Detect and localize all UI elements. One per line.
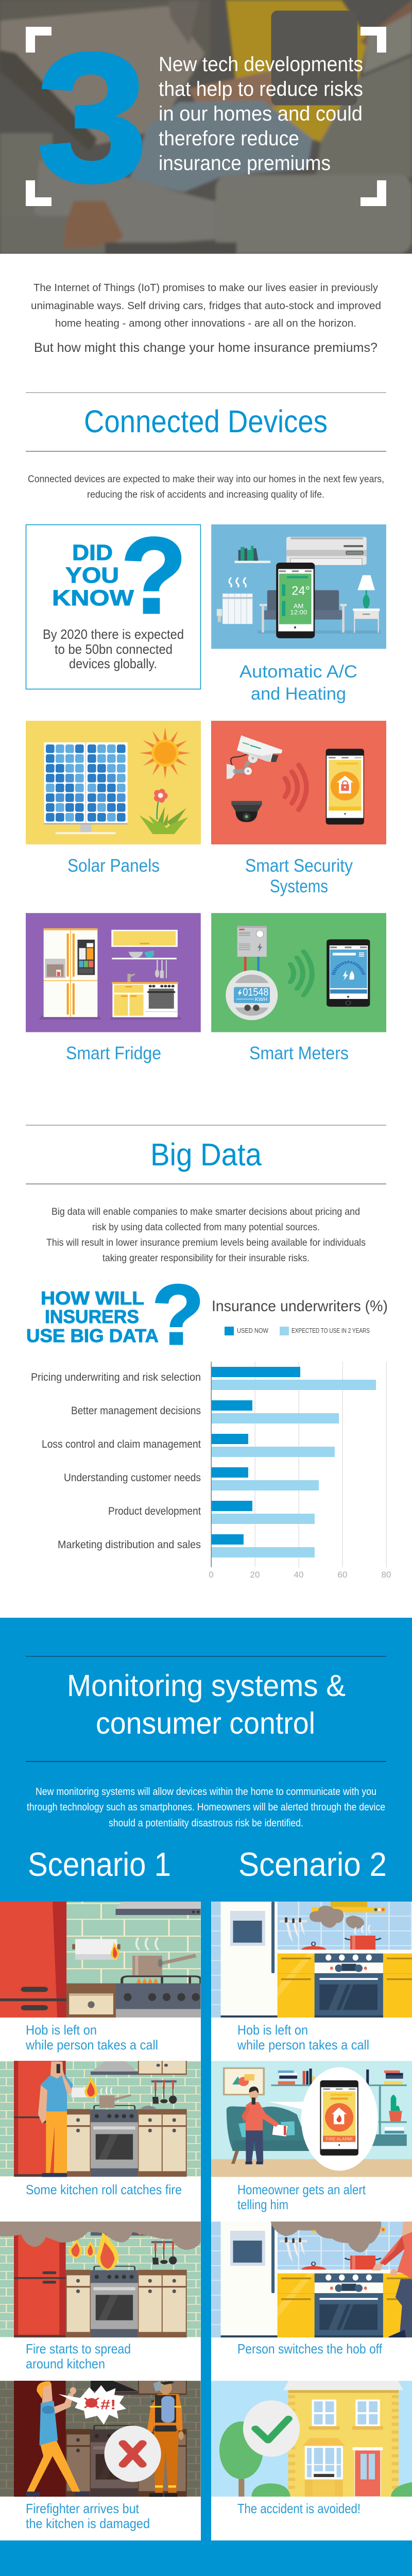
phone with thermostat: [276, 563, 315, 638]
hero title: that help to reduce risks: [159, 78, 363, 100]
icon: question mark: ?: [152, 1267, 204, 1363]
chart category labels: Loss control and claim management: [42, 1438, 201, 1450]
icon: flower and grass: [140, 789, 188, 834]
chart category labels: Pricing underwriting and risk selection: [31, 1371, 201, 1383]
chart category labels: Understanding customer needs: [64, 1472, 201, 1484]
did you know fact: [43, 626, 184, 671]
heading: how will insurers use big data: HOW WILL: [41, 1287, 144, 1309]
solar cells: [46, 744, 126, 822]
phone with thermostat: 12:00: [290, 608, 307, 616]
panel: smart meters illustration: KWH: [255, 996, 267, 1002]
scenario 2 step 2 caption: Homeowner gets an alert: [237, 2182, 366, 2197]
scenario 2 step 2 caption: telling him: [237, 2197, 288, 2212]
did you know fact: By 2020 there is expected: [43, 626, 184, 642]
heading: scenario 1: Scenario 1: [28, 1845, 171, 1883]
heading: scenario 2: Scenario 2: [238, 1845, 387, 1883]
corner bracket: bottom left: [26, 180, 52, 206]
scenario 1 step 3 illustration: [0, 2222, 201, 2337]
monitoring text block: [27, 1786, 385, 1829]
scenario 2 step 3 caption: Person switches the hob off: [237, 2341, 383, 2357]
icon: smoke clouds: [310, 1906, 344, 1928]
scenario 2 step 4 illustration: [211, 2381, 412, 2497]
panel: smart fridge illustration: [26, 913, 201, 1032]
panel: scenario 1 column background: [0, 1902, 201, 2540]
chart legend: EXPECTED TO USE IN 2 YEARS: [291, 1327, 370, 1334]
heading: how will insurers use big data: USE BIG DATA: [26, 1325, 159, 1346]
panel: did you know: [26, 515, 201, 689]
icon: smoke cloud: [0, 2222, 201, 2250]
icon: smoke cloud: [271, 2222, 381, 2252]
chart axis labels: 60: [338, 1570, 347, 1580]
hero panel: [0, 0, 412, 254]
monitoring text block: New monitoring systems will allow devices within the home to communicate with you: [36, 1786, 376, 1798]
angry homeowner: [26, 2381, 89, 2496]
hero title: [159, 53, 363, 175]
connected devices intro text: Connected devices are expected to make their way into our homes in the next few years,: [28, 473, 384, 485]
panel: smart security systems illustration: [211, 721, 386, 844]
caption: smart fridge: Smart Fridge: [66, 1043, 161, 1063]
intro text block: The Internet of Things (IoT) promises to make our lives easier in previously: [33, 282, 378, 294]
scenario 1 step 3 caption: around kitchen: [26, 2356, 105, 2371]
house: [283, 2381, 403, 2497]
firefighter: [147, 2380, 184, 2497]
caption: automatic AC and heating: [239, 662, 357, 704]
hero photo: woman with tablet on sofa: [0, 0, 412, 254]
scenario 2 step 3 illustration: [211, 2222, 412, 2337]
hero title: insurance premiums: [159, 152, 331, 175]
speech bubble with phone alert: [301, 2067, 378, 2171]
big data text block: Big data will enable companies to make smarter decisions about pricing and: [52, 1207, 360, 1217]
person switching off the hob: [372, 2222, 412, 2337]
icon: tick: [243, 2400, 300, 2457]
scenario 1 step 4 caption: Firefighter arrives but: [26, 2501, 140, 2516]
scenario 1 step 4 caption: [26, 2501, 150, 2531]
caption: solar panels: Solar Panels: [67, 856, 160, 876]
speech burst with swearing: [58, 2385, 126, 2425]
chart category labels: Product development: [108, 1505, 201, 1517]
scenario 2 step 2 illustration: [211, 2061, 412, 2177]
icon: sun: [140, 727, 191, 779]
corner bracket: top right: [360, 27, 386, 53]
person on the phone: [38, 2061, 73, 2177]
speech bubble with phone alert: FIRE ALARM!: [326, 2137, 353, 2141]
scenario 1 step 1 illustration: [0, 1902, 201, 2018]
scenario 1 step 2 caption: Some kitchen roll catches fire: [26, 2182, 182, 2197]
heading: monitoring systems and consumer control: consumer control: [96, 1706, 315, 1740]
icon: flames: [96, 2232, 119, 2270]
chart axis labels: 0: [209, 1570, 214, 1580]
speech burst with swearing: #!: [100, 2397, 116, 2412]
phone with thermostat: AM: [294, 602, 303, 609]
caption: smart security systems: Smart Security: [245, 856, 353, 876]
heading: Big Data: Big Data: [150, 1137, 262, 1172]
intro text block: But how might this change your home insurance premiums?: [34, 341, 377, 355]
chart legend: USED NOW: [237, 1327, 269, 1334]
scenario 1 step 1 caption: while person takes a call: [25, 2037, 158, 2053]
did you know heading: [52, 540, 134, 611]
big data text block: This will result in lower insurance premium levels being available for individuals: [46, 1238, 366, 1248]
panel: monitoring systems section background: [0, 1618, 412, 2576]
scenario 2 step 1 caption: [237, 2022, 369, 2053]
caption: smart security systems: Systems: [270, 876, 328, 896]
chart axis labels: 80: [382, 1570, 391, 1580]
scenario 1 step 4 caption: the kitchen is damaged: [26, 2516, 150, 2531]
scenario 2 step 1 caption: while person takes a call: [237, 2037, 369, 2053]
scenario 1 step 3 caption: Fire starts to spread: [26, 2341, 131, 2357]
icon: cross: [105, 2426, 161, 2482]
did you know fact: to be 50bn connected: [55, 641, 173, 657]
big data text block: risk by using data collected from many potential sources.: [92, 1222, 320, 1233]
chart axis labels: 40: [294, 1570, 303, 1580]
connected devices intro text: [28, 473, 384, 500]
panel: scenario 2 column background: [211, 1902, 412, 2540]
intro text block: home heating - among other innovations - are all on the horizon.: [55, 318, 356, 329]
caption: smart security systems: [245, 856, 353, 896]
panel: smart meters illustration: 01548: [243, 986, 268, 998]
phone with thermostat: 24°: [291, 584, 310, 598]
scenario 1 step 4 illustration: [0, 2380, 201, 2497]
icon: question mark: ?: [121, 515, 187, 636]
heading: monitoring systems and consumer control: [26, 1656, 386, 1762]
icon: wireless signal: [285, 765, 306, 810]
panel: smart meters illustration: [211, 913, 386, 1032]
did you know heading: KNOW: [52, 586, 134, 611]
scenario 2 step 1 caption: Hob is left on: [237, 2022, 308, 2038]
heading: how will insurers use big data: INSURERS: [45, 1306, 139, 1327]
panel: automatic AC and heating illustration: [211, 524, 386, 649]
bar chart: [31, 1362, 391, 1580]
monitoring text block: should a potentiality disastrous risk be identified.: [109, 1818, 303, 1829]
chart category labels: [31, 1371, 201, 1551]
corner bracket: bottom right: [360, 180, 386, 206]
intro text block: [31, 282, 381, 355]
scenario 1 step 3 caption: [26, 2341, 131, 2371]
icon: security camera: [227, 735, 282, 779]
chart axis labels: 20: [250, 1570, 260, 1580]
chart category labels: Better management decisions: [71, 1405, 201, 1417]
did you know heading: DID: [72, 540, 113, 565]
corner bracket: top left: [26, 27, 52, 53]
panel: solar panels illustration: [26, 721, 201, 844]
big data text block: taking greater responsibility for their insurable risks.: [102, 1253, 310, 1264]
chart legend: [225, 1327, 370, 1335]
icon: dome camera: [231, 801, 262, 822]
chart category labels: Marketing distribution and sales: [58, 1539, 201, 1551]
scenario 1 step 2 illustration: [0, 2061, 201, 2177]
chart title: Insurance underwriters (%): [212, 1298, 388, 1315]
big number 3: 3: [37, 15, 148, 220]
caption: automatic AC and heating: Automatic A/C: [239, 662, 357, 682]
scenario 1 step 1 caption: Hob is left on: [26, 2022, 97, 2038]
big data text block: [46, 1207, 366, 1264]
scenario 2 step 1 illustration: [211, 1902, 412, 2018]
scenario 1 step 1 caption: [25, 2022, 158, 2053]
intro text block: unimaginable ways. Self driving cars, fridges that auto-stock and improved: [31, 300, 381, 312]
hero title: in our homes and could: [159, 103, 363, 125]
heading: Connected Devices: Connected Devices: [84, 404, 328, 439]
heading: how will insurers use big data: [26, 1267, 204, 1363]
caption: automatic AC and heating: and Heating: [251, 684, 346, 704]
did you know heading: YOU: [65, 563, 119, 588]
caption: smart meters: Smart Meters: [249, 1043, 349, 1063]
chart axis labels: [209, 1570, 391, 1580]
scenario 2 step 4 caption: The accident is avoided!: [237, 2501, 360, 2516]
scenario 2 step 2 caption: [237, 2182, 366, 2212]
connected devices intro text: reducing the risk of accidents and increasing quality of life.: [87, 489, 324, 500]
icon: phone with lock: [326, 749, 364, 824]
hero title: therefore reduce: [159, 127, 299, 150]
tree and bushes: [219, 2421, 412, 2497]
hero title: New tech developments: [159, 53, 363, 76]
heading: monitoring systems and consumer control: Monitoring systems &: [67, 1669, 346, 1703]
did you know fact: devices globally.: [69, 656, 157, 671]
